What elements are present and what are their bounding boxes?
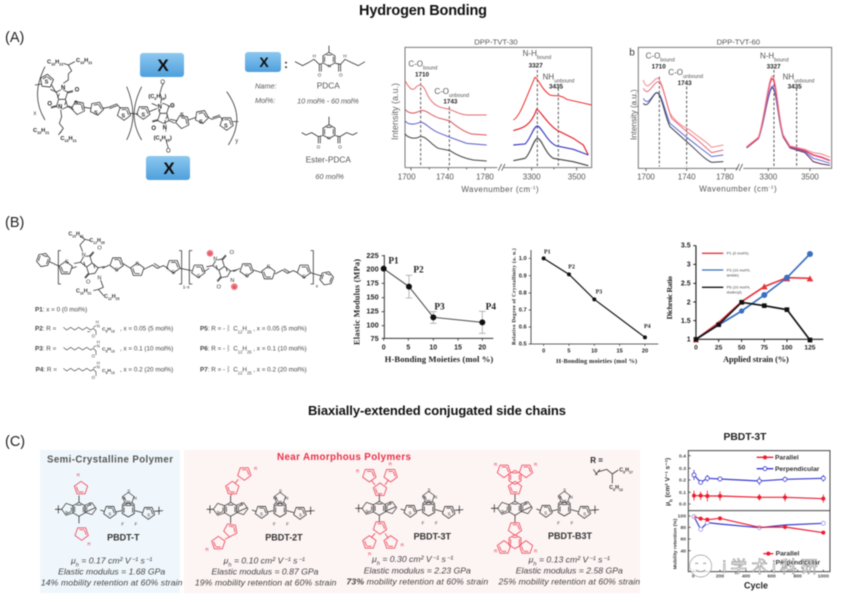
molecule PBDT-2T card: 19% mobility retention at 60% strain <box>195 578 337 588</box>
panel: B <box>5 215 823 380</box>
polymer structure DPP-TVT with X: C10H21 <box>47 60 63 67</box>
polymer structure DPP-TVT with X: (C9H18) <box>148 94 167 101</box>
chart: DPP-TVT-60 FTIR: 3300 <box>759 173 778 182</box>
molecule PBDT-2T card: Elastic modulus = 0.87 GPa <box>211 567 319 577</box>
polymer R group legend <box>35 307 307 380</box>
chart: PBDT-3T mobility vs cycle: Cycle <box>744 580 768 590</box>
chart: relative crystallinity: P4 <box>644 324 651 330</box>
R group definition: R = <box>590 456 603 465</box>
PDCA structure and labels: PDCA <box>317 81 340 91</box>
chart: elastic modulus: 200 <box>366 264 379 273</box>
polymer R group legend: H <box>97 361 100 366</box>
chart: PBDT-3T mobility vs cycle: 0.3 <box>679 466 686 472</box>
molecule PBDT-B3T card: SSSSSNNFF <box>501 488 586 525</box>
section title: biaxially-extended side chains: Biaxially-extended conjugated side chains <box>308 403 566 418</box>
R group definition: C6H13 <box>609 485 623 492</box>
near amorphous heading: Near Amorphous Polymers <box>277 452 412 463</box>
chart: DPP-TVT-60 FTIR: 1710 <box>652 63 666 70</box>
chart: DPP-TVT-30 FTIR: NHunbound <box>543 72 575 84</box>
molecule PBDT-T card: 14% mobility retention at 60% strain <box>41 578 183 588</box>
chart: elastic modulus: 150 <box>366 293 379 302</box>
chart: PBDT-3T mobility vs cycle: 80 <box>680 525 686 531</box>
panel: A <box>5 30 832 194</box>
polymer R group legend: H <box>97 339 100 344</box>
panel label C: (C) <box>5 434 25 450</box>
molecule PBDT-3T card: PBDT-3T <box>414 532 452 542</box>
polymer R group legend: P5: R = -⌇ C12H25 , x = 0.05 (5 mol%) <box>200 324 307 334</box>
near amorphous background <box>184 450 640 593</box>
X legend box: X <box>259 54 269 70</box>
chart: PBDT-3T mobility vs cycle: 100 <box>678 514 686 520</box>
polymer structure DPP-TVT with X: OO <box>160 80 171 155</box>
chart: DPP-TVT-30 FTIR: C-Obound <box>408 60 438 72</box>
chart: DPP-TVT-60 FTIR <box>629 37 832 193</box>
molecule PBDT-B3T card: 25% mobility retention at 60% strain <box>497 577 640 587</box>
molecule PBDT-3T card: 73% mobility retention at 60% strain <box>346 577 488 587</box>
molecule PBDT-3T card: Elastic modulus = 2.23 GPa <box>364 566 471 576</box>
chart: PBDT-3T mobility vs cycle: 800 <box>793 573 802 579</box>
chart: PBDT-3T mobility vs cycle: 1000 <box>818 573 829 579</box>
polymer R group legend: O <box>92 375 96 380</box>
chart: PBDT-3T mobility vs cycle: 0.4 <box>679 453 686 459</box>
X box bottom: X <box>163 159 175 178</box>
chart: elastic modulus: 125 <box>366 307 379 316</box>
polymer R group legend: O <box>92 354 96 359</box>
chart: DPP-TVT-30 FTIR: 1743 <box>443 99 458 106</box>
chart: PBDT-3T mobility vs cycle: Mobility retention (%) <box>672 518 678 569</box>
polymer structure with R groups: 1-x <box>183 285 190 291</box>
R group definition <box>590 456 633 492</box>
chart: DPP-TVT-60 FTIR: b <box>629 48 635 59</box>
polymer R group legend: P3: R = <box>35 345 57 352</box>
chart: DPP-TVT-60 FTIR: 1743 <box>678 80 692 87</box>
polymer R group legend: N <box>97 343 100 348</box>
polymer R group legend: N <box>97 323 100 328</box>
chart: DPP-TVT-60 FTIR: 3327 <box>767 63 781 70</box>
chart: PBDT-3T mobility vs cycle: Perpendicular <box>775 466 820 473</box>
chart: relative crystallinity: P1 <box>544 250 551 256</box>
polymer R group legend: C8H13 <box>102 368 115 375</box>
polymer R group legend: , x = 0.05 (5 mol%) <box>120 325 173 332</box>
chart: PBDT-3T mobility vs cycle: 0 <box>692 573 695 579</box>
chart: DPP-TVT-60 FTIR: Wavenumber (cm-1) <box>699 184 777 193</box>
polymer structure with R groups: C10H21 <box>68 232 84 239</box>
chart: DPP-TVT-30 FTIR: 3500 <box>568 173 586 182</box>
chart: PBDT-3T mobility vs cycle: 40 <box>680 548 686 554</box>
polymer structure with R groups: C12H25 <box>89 238 105 245</box>
chart: PBDT-3T mobility vs cycle: 600 <box>767 573 776 579</box>
chart: dichroic ratio: 50 <box>738 345 746 352</box>
R group definition: C6H17 <box>619 468 633 475</box>
chart: dichroic ratio: 1.5 <box>681 318 691 325</box>
molecule PBDT-2T card: RR <box>205 466 258 552</box>
polymer structure DPP-TVT with X: x <box>33 111 36 117</box>
chart: DPP-TVT-60 FTIR: C-Ounbound <box>668 68 703 80</box>
chart: DPP-TVT-60 FTIR: 3435 <box>788 83 802 90</box>
chart: relative crystallinity: 0.7 <box>519 308 527 314</box>
chart: relative crystallinity: 0.6 <box>519 325 527 331</box>
polymer R group legend: P7: R = -⌇ C12H25 , x = 0.2 (20 mol%) <box>200 365 307 375</box>
X box bottom <box>146 156 190 180</box>
chart: DPP-TVT-60 FTIR: Intensity (a.u.) <box>629 89 638 140</box>
polymer structure with R groups: C10H21 <box>76 288 91 295</box>
watermark: i学术i科研 <box>722 558 817 577</box>
polymer R group legend: P6: R = -⌇ C12H25 , x = 0.1 (10 mol%) <box>200 344 307 354</box>
polymer structure with R groups: x <box>316 284 319 290</box>
chart: DPP-TVT-30 FTIR: 1710 <box>415 72 430 79</box>
chart: PBDT-3T mobility vs cycle <box>664 432 830 590</box>
chart: elastic modulus: 10 <box>429 344 437 351</box>
polymer structure DPP-TVT with X: C10H21 <box>60 136 77 143</box>
chart: DPP-TVT-30 FTIR: 1780 <box>476 173 494 182</box>
polymer R group legend: P4: R = <box>36 367 57 374</box>
chart: elastic modulus: P3 <box>434 302 445 312</box>
chart: dichroic ratio <box>665 243 823 364</box>
molecule PBDT-3T card <box>346 461 488 587</box>
molecule PBDT-2T card <box>195 466 337 588</box>
chart: dichroic ratio: dodecyl) <box>727 290 742 295</box>
panel label A: (A) <box>5 30 24 46</box>
chart: dichroic ratio: 3 <box>687 262 691 269</box>
chart: relative crystallinity: 1.0 <box>519 256 527 262</box>
chart: relative crystallinity <box>510 248 658 365</box>
chart: dichroic ratio: 2.5 <box>681 281 691 288</box>
chart: DPP-TVT-30 FTIR: Wavenumber (cm-1) <box>461 185 539 194</box>
molecule PBDT-T card: PBDT-T <box>107 533 140 543</box>
chart: PBDT-3T mobility vs cycle: μh (cm² V⁻¹ s⁻¹) <box>664 458 673 506</box>
chart: relative crystallinity: 20 <box>642 349 648 355</box>
chart: dichroic ratio: Applied strain (%) <box>723 355 789 364</box>
chart: PBDT-3T mobility vs cycle: 0.0 <box>679 502 686 508</box>
chart: relative crystallinity: P3 <box>596 289 602 295</box>
chart: dichroic ratio: 100 <box>781 345 793 352</box>
chart: dichroic ratio: P3 (10 mol%, <box>727 267 751 272</box>
chart: elastic modulus: P2 <box>413 266 424 276</box>
chart: DPP-TVT-30 FTIR <box>398 37 592 194</box>
chart: elastic modulus: 175 <box>366 279 379 288</box>
X legend box: : <box>284 57 288 71</box>
polymer structure DPP-TVT with X: NOONNOON <box>47 85 175 132</box>
chart: dichroic ratio: 3.5 <box>681 243 691 250</box>
polymer R group legend: P2: R = <box>35 325 57 332</box>
chart: relative crystallinity: 0 <box>542 349 545 355</box>
chart: DPP-TVT-30 FTIR: 3435 <box>549 83 564 90</box>
chart: DPP-TVT-30 FTIR: 1740 <box>436 173 454 182</box>
molecule PBDT-2T card: μh = 0.10 cm² V⁻¹ s⁻¹ <box>223 555 305 568</box>
molecule PBDT-3T card: μh = 0.30 cm² V⁻¹ s⁻¹ <box>371 554 453 567</box>
chart: DPP-TVT-60 FTIR: 3500 <box>801 173 819 182</box>
molecule PBDT-T card <box>41 454 183 588</box>
polymer structure DPP-TVT with X: C10H21 <box>33 128 49 135</box>
chart: relative crystallinity: 5 <box>567 349 571 355</box>
polymer R group legend: O <box>92 334 96 339</box>
molecule PBDT-B3T card <box>491 462 640 587</box>
chart: relative crystallinity: 0.5 <box>519 342 527 348</box>
chart: dichroic ratio: 125 <box>804 345 816 352</box>
polymer structure with R groups: C12H25 <box>104 294 119 301</box>
chart: elastic modulus: P1 <box>388 257 399 267</box>
chart: DPP-TVT-30 FTIR: 3327 <box>529 63 543 70</box>
molecule PBDT-T card: Elastic modulus = 1.68 GPa <box>58 567 165 577</box>
y-axis label intensity: Intensity (a.u.) <box>390 83 400 140</box>
PDCA structure and labels <box>255 46 365 105</box>
chart: PBDT-3T mobility vs cycle: Parallel <box>776 550 799 557</box>
X box top: X <box>157 56 169 75</box>
chart: DPP-TVT-60 FTIR: 1740 <box>678 173 696 182</box>
chart: DPP-TVT-30 FTIR: 1700 <box>398 173 416 182</box>
X legend box <box>245 52 288 72</box>
chart: elastic modulus <box>352 251 496 364</box>
panel label B: (B) <box>5 215 24 231</box>
chart: relative crystallinity: Relative Degree of Crystallinity (a. u.) <box>510 248 517 345</box>
molecule PBDT-B3T card: μh = 0.13 cm² V⁻¹ s⁻¹ <box>528 554 610 567</box>
Ester-PDCA structure and labels: OON <box>317 135 342 149</box>
chart: elastic modulus: 0 <box>382 344 386 351</box>
X box top <box>140 53 184 77</box>
chart: PBDT-3T mobility vs cycle: 0.2 <box>679 478 686 484</box>
chart: relative crystallinity: H-Bonding moieties (mol %) <box>556 358 637 365</box>
chart: elastic modulus: 15 <box>454 344 462 351</box>
molecule PBDT-3T card: SSSSSNNFF <box>365 488 451 525</box>
chart: relative crystallinity: 0.8 <box>519 291 527 297</box>
chart: elastic modulus: Elastic Modulus (MPa) <box>352 259 361 345</box>
polymer R group legend: , x = 0.1 (10 mol%) <box>120 345 173 352</box>
chart: elastic modulus: 100 <box>366 321 379 330</box>
polymer structure with R groups: RR <box>209 251 236 289</box>
polymer structure with R groups: SSSSSSSS <box>65 259 306 281</box>
chart: dichroic ratio: 1 <box>687 337 691 344</box>
chart: relative crystallinity: 15 <box>616 349 623 355</box>
panel: C <box>5 432 830 593</box>
chart: PBDT-3T mobility vs cycle: 200 <box>716 573 724 579</box>
polymer R group legend: H <box>96 319 99 324</box>
title: hydrogen bonding: Hydrogen Bonding <box>359 3 487 19</box>
semi-crystalline background <box>40 450 180 593</box>
molecule PBDT-B3T card: PBDT-B3T <box>548 531 592 541</box>
PDCA structure and labels: Name: <box>255 81 277 90</box>
chart: dichroic ratio: P1 (0 mol%) <box>727 250 749 255</box>
molecule PBDT-3T card: RRRR <box>356 461 405 556</box>
chart: elastic modulus: 225 <box>366 251 379 260</box>
polymer structure DPP-TVT with X: y <box>235 139 238 145</box>
chart: DPP-TVT-60 FTIR: N-Hbound <box>760 51 789 63</box>
molecule PBDT-B3T card: Elastic modulus = 2.58 GPa <box>516 566 623 576</box>
molecule PBDT-T card: RR <box>77 473 91 546</box>
chart: dichroic ratio: 25 <box>715 345 723 352</box>
polymer structure DPP-TVT with X: SSSSSSSS <box>45 79 228 129</box>
polymer R group legend: P1: x = 0 (0 mol%) <box>35 307 87 314</box>
chart: elastic modulus: 75 <box>371 334 379 343</box>
polymer structure with R groups <box>35 232 335 301</box>
molecule PBDT-B3T card: RRRR <box>494 462 538 554</box>
PDCA structure and labels: Mol%: <box>255 96 275 105</box>
chart: DPP-TVT-30 FTIR: DPP-TVT-30 <box>474 37 518 46</box>
polymer R group legend: N <box>97 365 100 370</box>
molecule PBDT-T card: μh = 0.17 cm² V⁻¹ s⁻¹ <box>70 555 152 568</box>
PDCA structure and labels: HHOON <box>313 53 347 77</box>
polymer structure DPP-TVT with X <box>33 58 238 155</box>
polymer R group legend: C8H13 <box>102 347 115 354</box>
chart: elastic modulus: H-Bonding Moieties (mol %) <box>385 354 493 364</box>
chart: PBDT-3T mobility vs cycle: 0.1 <box>679 490 686 496</box>
polymer R group legend: C8H13 <box>102 326 115 333</box>
chart: DPP-TVT-60 FTIR: 1780 <box>716 173 734 182</box>
chart: PBDT-3T mobility vs cycle: Parallel <box>775 455 799 462</box>
chart: dichroic ratio: 0 <box>694 345 698 352</box>
molecule PBDT-2T card: SSSSSNNFF <box>217 489 302 526</box>
chart: DPP-TVT-30 FTIR: N-Hbound <box>523 49 551 61</box>
chart: PBDT-3T mobility vs cycle: PBDT-3T <box>723 432 767 443</box>
watermark <box>690 555 817 577</box>
molecule PBDT-2T card: PBDT-2T <box>265 533 303 543</box>
chart: PBDT-3T mobility vs cycle: 60 <box>680 537 686 543</box>
Ester-PDCA structure and labels <box>302 117 357 181</box>
chart: dichroic ratio: amide) <box>727 272 739 277</box>
polymer structure DPP-TVT with X: (C9H18) <box>154 135 172 142</box>
chart: relative crystallinity: 10 <box>591 349 597 355</box>
chart: elastic modulus: P4 <box>486 302 496 312</box>
molecule PBDT-T card: Semi-Crystalline Polymer <box>47 454 173 465</box>
polymer structure DPP-TVT with X: C10H21 <box>76 58 92 65</box>
chart: PBDT-3T mobility vs cycle: 400 <box>742 573 750 579</box>
chart: elastic modulus: 20 <box>478 344 486 351</box>
chart: relative crystallinity: 0.9 <box>519 273 527 279</box>
chart: dichroic ratio: P6 (10 mol%, <box>727 285 751 290</box>
chart: PBDT-3T mobility vs cycle: Perpendicular <box>776 560 820 567</box>
chart: dichroic ratio: 2 <box>687 299 691 306</box>
chart: elastic modulus: 5 <box>406 344 410 351</box>
chart: DPP-TVT-60 FTIR: C-Obound <box>646 51 675 63</box>
chart: DPP-TVT-30 FTIR: C-Ounbound <box>434 87 469 99</box>
chart: DPP-TVT-60 FTIR: DPP-TVT-60 <box>717 37 760 46</box>
chart: dichroic ratio: Dichroic Ratio <box>665 276 674 319</box>
chart: DPP-TVT-60 FTIR: NHunbound <box>783 72 814 84</box>
Ester-PDCA structure and labels: Ester-PDCA <box>306 155 351 165</box>
Ester-PDCA structure and labels: 60 mol% <box>315 172 344 181</box>
chart: relative crystallinity: P2 <box>568 265 575 271</box>
PDCA structure and labels: 10 mol% - 60 mol% <box>297 96 359 105</box>
chart: DPP-TVT-60 FTIR: 1700 <box>637 173 655 182</box>
polymer R group legend: , x = 0.2 (20 mol%) <box>120 367 173 374</box>
polymer structure with R groups: NONONONO <box>82 245 235 291</box>
chart: dichroic ratio: 75 <box>761 345 768 352</box>
molecule PBDT-T card: SSSSSNNFF <box>65 489 150 526</box>
chart: DPP-TVT-30 FTIR: 3300 <box>523 173 541 182</box>
